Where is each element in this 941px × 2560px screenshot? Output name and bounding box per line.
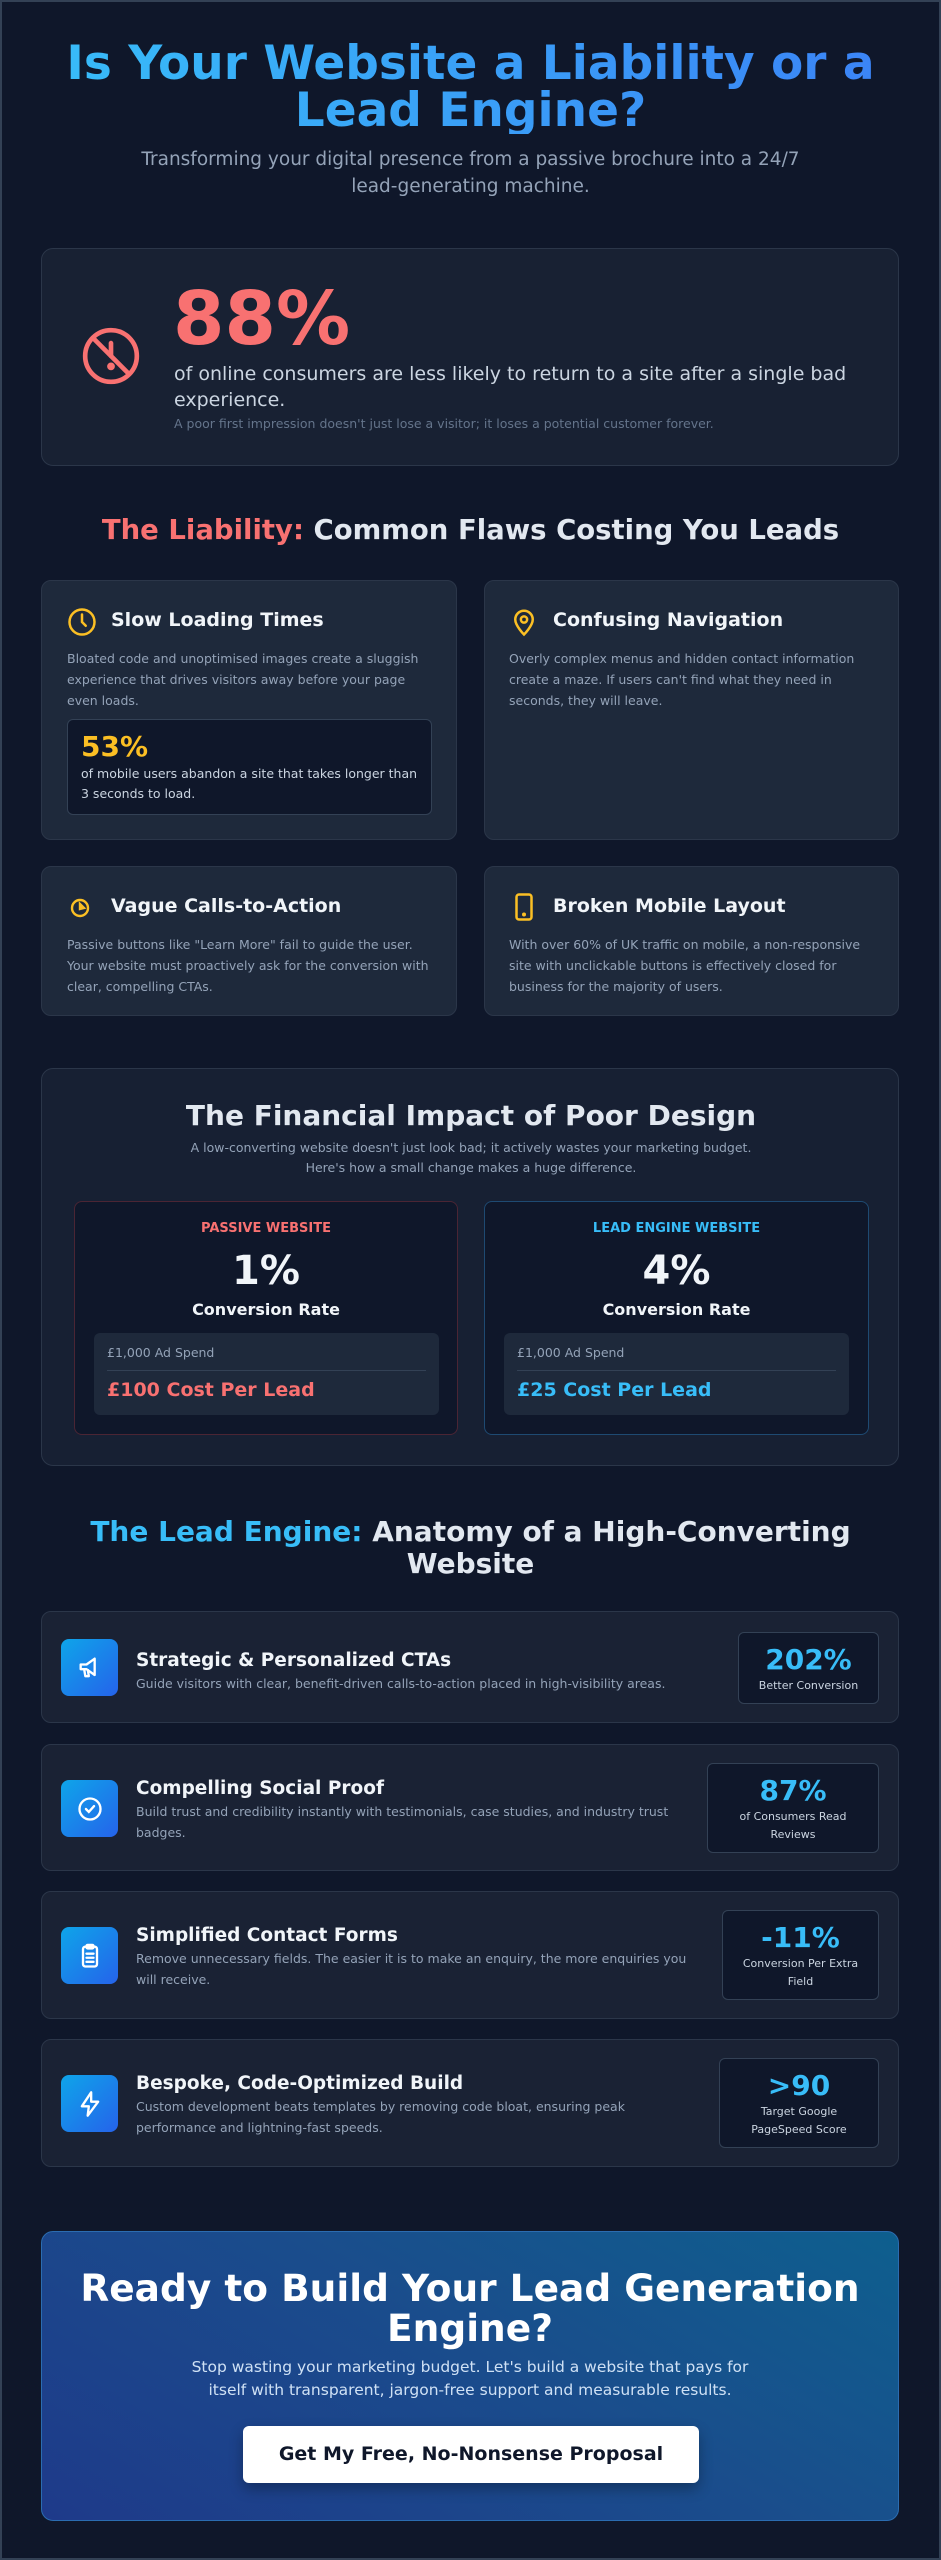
big number: 88% [173,276,350,362]
row: CTAs: Strategic & Personalized CTAs [136,1650,451,1671]
row: bespoke build [41,2039,899,2167]
heading: The Financial Impact of Poor Design [186,1099,756,1132]
card: broken mobile: Broken Mobile Layout [553,895,786,917]
passive box: £1,000 Ad Spend [107,1345,214,1360]
card: slow loading: Slow Loading Times [111,609,324,631]
icon: clipboard [61,1927,118,1984]
icon: phone [515,893,533,921]
passive box: PASSIVE WEBSITE [201,1221,331,1236]
title: Is Your Website a Liability or a Lead Engine? [66,36,875,138]
CTA text: Stop wasting your marketing budget. Let's build a website that pays for [192,2358,748,2376]
lead engine box: Conversion Rate [603,1300,750,1319]
passive box: 1% [232,1248,300,1294]
subtext: A low-converting website doesn't just look bad; it actively wastes your marketing budget. [191,1140,751,1155]
stat: -11% [761,1921,840,1954]
passive box: Conversion Rate [192,1300,340,1319]
button: Get My Free, No-Nonsense Proposal [279,2443,663,2465]
icon: map pin [514,610,534,636]
row: social proof: Compelling Social Proof [136,1778,384,1799]
card: vague CTAs: Vague Calls-to-Action [111,895,341,917]
row: contact forms: Remove unnecessary fields. The easier it is to make an enquiry, the more enquiries you will receive. [136,1951,686,1987]
stat: 202% [765,1643,852,1676]
row: CTAs [41,1611,899,1723]
stat [722,1910,879,2000]
card: slow loading: Bloated code and unoptimised images create a sluggish experience that drives visitors away before your page even loads. [67,651,418,708]
panel: 88% stat [41,248,899,466]
subtext: Here's how a small change makes a huge difference. [306,1160,636,1175]
CTA heading: Ready to Build Your Lead Generation [80,2266,860,2310]
stat: Better Conversion [759,1679,858,1692]
row: bespoke build: Custom development beats templates by removing code bloat, ensuring peak performance and lightning-fast speeds. [136,2099,625,2135]
button [243,2426,699,2483]
subtext [190,1140,751,1175]
card: slow loading [41,580,457,840]
stat: Reviews [770,1828,815,1841]
stat [707,1763,879,1853]
row: social proof: Build trust and credibility instantly with testimonials, case studies, and industry trust badges. [136,1804,668,1840]
stat: of Consumers Read [739,1810,847,1823]
CTA text [192,2358,748,2399]
row: contact forms [41,1891,899,2019]
CTA text: itself with transparent, jargon-free support and measurable results. [208,2381,732,2399]
card: vague CTAs: Passive buttons like "Learn More" fail to guide the user. Your website must proactively ask for the conversion with clear, compelling CTAs. [67,937,429,994]
lead engine box: £25 Cost Per Lead [517,1379,712,1401]
row: contact forms: Simplified Contact Forms [136,1925,398,1946]
subtitle: Transforming your digital presence from a passive brochure into a 24/7 lead-generating machine. [141,149,800,197]
stat: 53%: 53% [81,730,148,763]
stat: Conversion Per Extra [743,1957,858,1970]
CTA panel [41,2231,899,2521]
icon: megaphone [61,1639,118,1696]
lead engine box: £1,000 Ad Spend [517,1345,624,1360]
icon: lightning [61,2075,118,2132]
passive box [74,1201,458,1435]
stat: 53% [67,719,432,815]
heading: liability: The Liability: Common Flaws Costing You Leads [102,514,839,546]
icon: check circle [61,1780,118,1837]
stat: Target Google [761,2105,837,2118]
card: broken mobile: With over 60% of UK traffic on mobile, a non-responsive site with unclickable buttons is effectively closed for business for the majority of users. [509,937,860,994]
stat [719,2058,879,2148]
CTA heading [80,2266,860,2350]
lead engine box: 4% [643,1248,710,1294]
stat: 53%: of mobile users abandon a site that takes longer than 3 seconds to load. [81,766,417,801]
note: A poor first impression doesn't just lose a visitor; it loses a potential customer forever. [174,416,714,431]
row: social proof [41,1744,899,1871]
stat text: of online consumers are less likely to return to a site after a single bad experience. [174,363,846,411]
card: vague CTAs [41,866,457,1016]
lead engine box: LEAD ENGINE WEBSITE [593,1221,760,1236]
row: CTAs: Guide visitors with clear, benefit-driven calls-to-action placed in high-visibility areas. [136,1676,665,1691]
stat: >90 [768,2069,830,2102]
icon: clock [68,608,96,636]
card: confusing navigation: Confusing Navigation [553,609,783,631]
lead engine box [484,1201,869,1435]
card: confusing navigation [484,580,899,840]
stat: 87% [759,1774,827,1807]
CTA heading: Engine? [387,2306,553,2350]
row: bespoke build: Bespoke, Code-Optimized Build [136,2073,463,2094]
stat [738,1632,879,1704]
heading: lead engine: The Lead Engine: Anatomy of a High-Converting Website [90,1515,851,1580]
passive box: £100 Cost Per Lead [107,1379,315,1401]
card: confusing navigation: Overly complex menus and hidden contact information create a maze. If users can't find what they need in seconds, they will leave. [509,651,854,708]
stat: PageSpeed Score [751,2123,847,2136]
icon: pointer [70,898,90,918]
panel: financial impact [41,1068,899,1466]
icon: no-entry [82,328,140,384]
card: broken mobile [484,866,899,1016]
stat: Field [788,1975,813,1988]
